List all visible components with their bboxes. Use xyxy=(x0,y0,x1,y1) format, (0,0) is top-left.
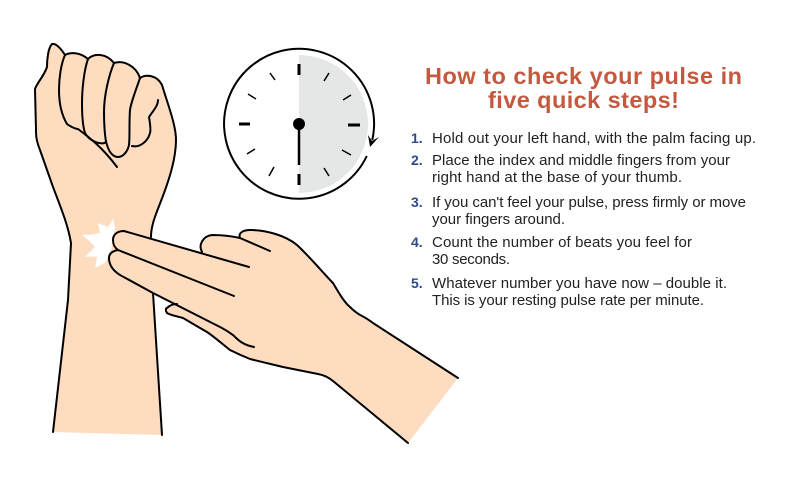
step 4: 4. xyxy=(411,234,423,250)
icon: stopwatch clock showing 30 seconds xyxy=(224,49,379,199)
step 4: 30 seconds. xyxy=(432,251,510,268)
step 4 xyxy=(411,234,692,268)
title: five quick steps! xyxy=(488,87,679,113)
step numbers and instructions xyxy=(411,130,756,309)
fingers of the fist xyxy=(59,53,158,167)
step 2: Place the index and middle fingers from your xyxy=(432,152,730,169)
step 1: Hold out your left hand, with the palm facing up. xyxy=(432,130,756,147)
icon: pulse starburst xyxy=(82,219,115,268)
step 5: Whatever number you have now – double it. xyxy=(432,275,727,292)
step 3: If you can't feel your pulse, press firmly or move xyxy=(432,194,746,211)
illustration: left arm with closed fist xyxy=(35,44,176,435)
step 4: Count the number of beats you feel for xyxy=(432,234,692,251)
title: How to check your pulse in xyxy=(425,63,742,89)
illustration: right hand taking the pulse xyxy=(109,230,458,443)
step 2 xyxy=(411,152,730,186)
step 5 xyxy=(411,275,727,309)
step 3 xyxy=(411,194,746,228)
step 2: 2. xyxy=(411,152,423,168)
step 5: 5. xyxy=(411,275,423,291)
step 2: right hand at the base of your thumb. xyxy=(432,169,682,186)
step 1: 1. xyxy=(411,130,423,146)
step 3: 3. xyxy=(411,194,423,210)
step 5: This is your resting pulse rate per minute. xyxy=(432,292,704,309)
step 3: your fingers around. xyxy=(432,211,565,228)
title xyxy=(425,63,742,113)
